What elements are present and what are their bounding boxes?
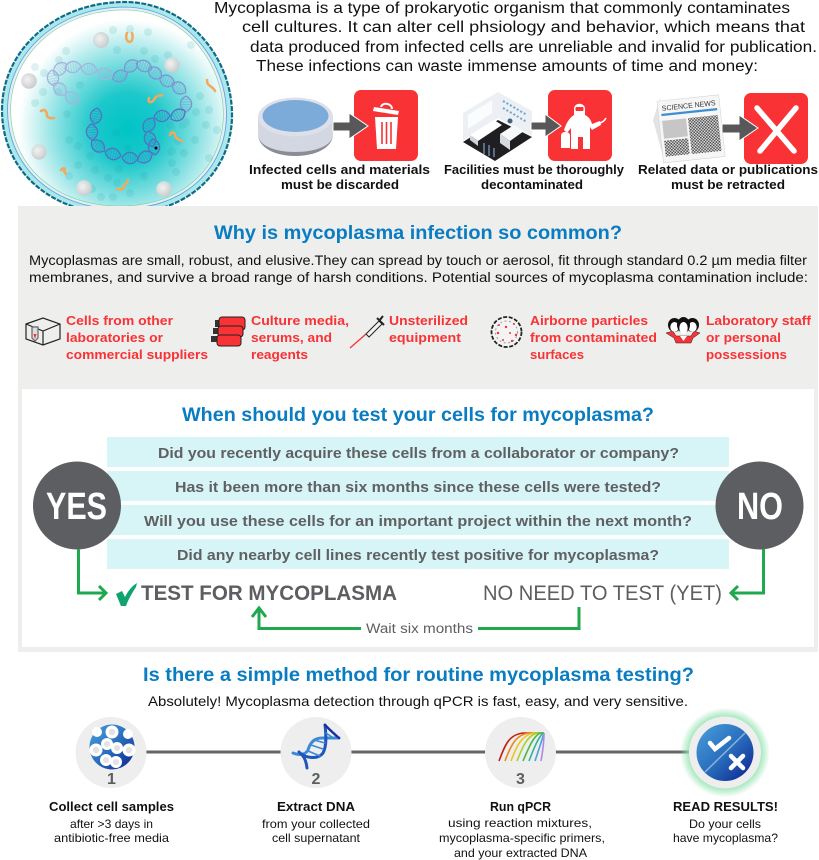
illustration: mycoplasma cell [2,2,232,214]
step 3 text: Run qPCR [490,800,551,814]
step 3 text: mycoplasma-specific primers, [439,831,605,845]
label: equipment [389,330,462,345]
label: possessions [706,347,787,362]
intro paragraph: Mycoplasma is a type of prokaryotic organism that commonly contaminates [214,0,790,17]
label: serums, and [251,330,332,345]
DNA strand [46,57,192,166]
icon: petri dish [258,98,333,156]
step 2 text: from your collected [262,817,370,831]
cytoplasm ribosome dots [31,25,221,201]
source: airborne particles [492,313,657,362]
arrow [722,115,758,141]
caption: Facilities must be thoroughly [444,163,624,177]
test for mycoplasma: TEST FOR MYCOPLASMA [141,582,397,605]
panel: when to test [22,389,814,647]
label [389,313,468,345]
step 1 text: after >3 days in [70,817,153,831]
grey particles [21,32,180,197]
arrow: wait loop [252,607,579,628]
question rows [107,437,729,569]
step 1 text: antibiotic-free media [54,831,169,845]
icon: stacked red bottles [211,317,245,346]
caption: decontaminated [481,178,583,192]
process line [146,750,690,754]
label: reagents [251,347,308,362]
step 3 [485,717,556,788]
consequence 2: decontaminate facilities [444,90,624,192]
question rows: Did you recently acquire these cells from a collaborator or company? [158,446,679,462]
step 4 text: have mycoplasma? [673,831,778,845]
icon: syringe [350,316,384,348]
label: from contaminated [530,330,657,345]
heading: routine testing: Is there a simple method for routine mycoplasma testing? [143,665,694,686]
body text: membranes, and survive a broad range of harsh conditions. Potential sources of mycoplasma contamination include: [29,270,808,285]
NO circle [716,462,804,550]
number: 1 [107,771,116,788]
icon: check and cross [710,738,743,768]
caption: must be retracted [671,178,785,192]
wait label: Wait six months [366,621,473,636]
panel: why so common [18,206,818,652]
step 4: read results [680,708,770,798]
caption: Infected cells and materials [249,163,430,177]
consequence 1: discard infected cells [249,90,430,192]
heading: Why is mycoplasma infection so common? [214,223,622,244]
icon: rainbow qPCR curves [499,733,544,761]
step 3 text: using reaction mixtures, [448,816,592,830]
arrow [531,114,561,137]
subheading: Absolutely! Mycoplasma detection through qPCR is fast, easy, and very sensitive. [148,693,688,709]
number: 2 [312,771,321,788]
label [706,313,812,362]
check mark [116,583,137,606]
step 4 text [673,800,778,845]
label [251,313,349,362]
caption: Related data or publications [638,163,818,177]
icon: red hazmat figure [548,90,612,161]
no need to test: NO NEED TO TEST (YET) [483,582,722,605]
step 1 [76,717,146,788]
intro paragraph: cell cultures. It can alter cell phsiology and behavior, which means that [242,19,806,36]
step 2 text [262,800,370,845]
YES circle [33,462,121,550]
caption: must be discarded [281,178,399,192]
step 4 text: Do your cells [689,817,761,831]
step 2 text: cell supernatant [272,831,361,845]
label: or personal [706,330,781,345]
caption [249,163,430,192]
intro paragraph: data produced from infected cells are unreliable and invalid for publication. [250,39,817,56]
question rows: Will you use these cells for an important project within the next month? [144,514,692,530]
arrow: no to no-test [731,549,764,600]
label: surfaces [530,347,584,362]
label: Airborne particles [530,313,648,328]
icon: red X [744,93,808,164]
icon: DNA [293,725,339,768]
orange mRNA worms [41,33,215,190]
number: 3 [516,771,525,788]
icon: newspaper: SCIENCE NEWS [661,98,716,113]
YES circle: YES [46,486,107,528]
icon: people [666,317,700,343]
question rows: Did any nearby cell lines recently test positive for mycoplasma? [177,548,659,564]
icon: red trash can [354,90,418,161]
arrow [333,113,368,139]
label: commercial suppliers [66,347,208,362]
body text: Mycoplasmas are small, robust, and elusive.They can spread by touch or aerosol, fit through standard 0.2 µm media filter [29,253,808,268]
label: Laboratory staff [706,313,812,328]
source: laboratory staff [666,313,812,362]
step 3 text [439,800,605,860]
label: Cells from other [66,313,173,328]
question rows: Has it been more than six months since these cells were tested? [175,480,661,496]
icon: box [26,318,60,345]
step 4 text: READ RESULTS! [673,800,778,814]
arrow: yes to test [78,549,106,600]
step 2 [280,717,352,788]
label: laboratories or [66,330,163,345]
step 2 text: Extract DNA [277,800,355,814]
caption [638,163,818,192]
source: cells from labs [26,313,208,362]
label [66,313,208,362]
icon: newspaper [653,95,725,163]
caption [444,163,624,192]
step 1 text [49,800,174,845]
heading: When should you test your cells for mycoplasma? [182,405,654,426]
label: Unsterilized [389,313,468,328]
icon: isometric lab [463,92,532,161]
body text [29,253,808,285]
step 1 text: Collect cell samples [49,800,174,814]
label [530,313,657,362]
NO circle: NO [737,486,783,528]
icon: particle cloud [492,317,522,347]
label: Culture media, [251,313,349,328]
intro paragraph [214,0,817,75]
source: unsterilized equipment [350,313,468,348]
step 3 text: and your extracted DNA [454,846,587,860]
consequence 3: retract publications [638,93,818,192]
intro paragraph: These infections can waste immense amounts of time and money: [256,58,758,75]
icon: cells [90,724,136,770]
source: culture media [211,313,349,362]
